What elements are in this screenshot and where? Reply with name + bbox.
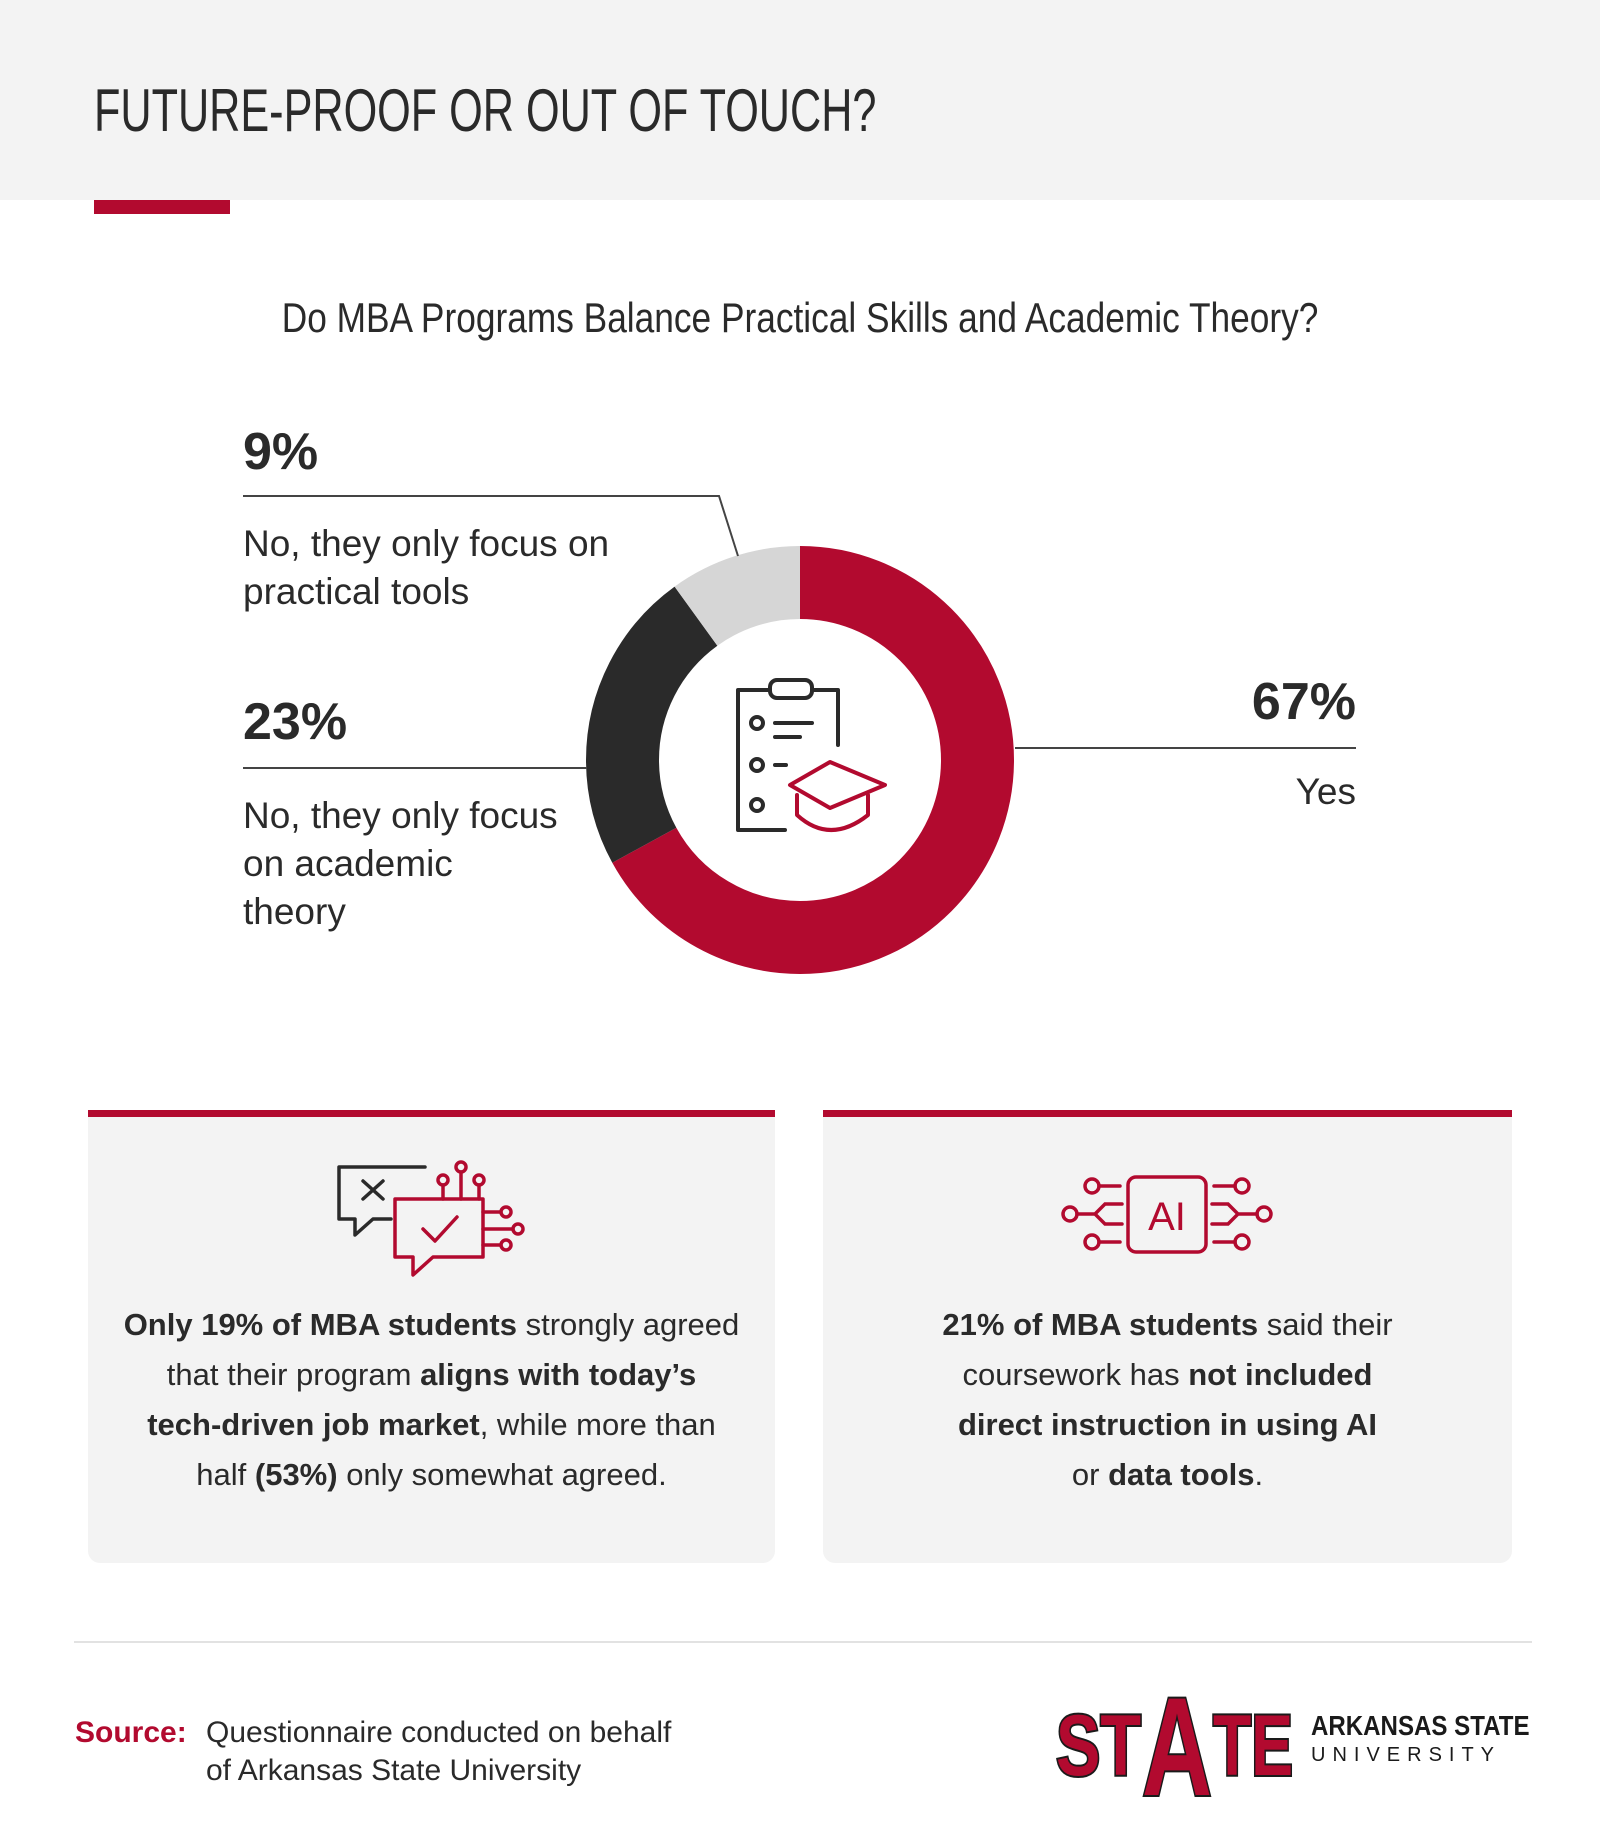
title: FUTURE-PROOF OR OUT OF TOUCH? <box>94 77 876 144</box>
text: left card <box>124 1307 739 1492</box>
source: of Arkansas State University <box>206 1754 581 1787</box>
icon: clipboard with graduation cap <box>738 680 885 830</box>
divider <box>74 1641 1532 1643</box>
label: 67% <box>1252 673 1356 812</box>
label: 67%: Yes <box>1296 771 1356 812</box>
label: 23% <box>243 693 558 932</box>
text: right card: 21% of MBA students said their <box>942 1307 1393 1342</box>
text: right card: coursework has not included <box>962 1357 1372 1392</box>
label: 23%: on academic <box>243 843 453 884</box>
icon: chat bubbles <box>337 1160 525 1277</box>
text: left card: tech-driven job market, while more than <box>147 1407 716 1442</box>
red accent bar <box>94 200 230 214</box>
text: left card: that their program aligns with today’s <box>167 1357 696 1392</box>
logo: STATE <box>1056 1675 1293 1805</box>
label: 23%: No, they only focus <box>243 795 558 836</box>
leader lines <box>243 496 738 556</box>
logo: wordmark: ARKANSAS STATE <box>1311 1710 1530 1741</box>
card: right <box>823 1110 1512 1563</box>
label: 9%: No, they only focus on <box>243 523 609 564</box>
text: right card: direct instruction in using AI <box>958 1407 1377 1442</box>
source <box>75 1716 672 1787</box>
source: Source: <box>75 1716 187 1749</box>
label: 9%: 9% <box>243 423 318 481</box>
card: left <box>88 1110 775 1563</box>
logo: wordmark <box>1311 1710 1530 1766</box>
text: left card: half (53%) only somewhat agreed. <box>196 1457 667 1492</box>
icon: AI chip <box>1061 1175 1273 1254</box>
logo: wordmark: UNIVERSITY <box>1311 1744 1501 1766</box>
icon: AI chip: AI <box>1148 1195 1186 1239</box>
logo: STATE: ST <box>1056 1698 1141 1794</box>
source: Questionnaire conducted on behalf <box>206 1716 671 1749</box>
text: left card: Only 19% of MBA students strongly agreed <box>124 1307 739 1342</box>
subtitle: Do MBA Programs Balance Practical Skills and Academic Theory? <box>282 294 1318 341</box>
text: right card <box>942 1307 1393 1492</box>
label: 9% <box>243 423 609 612</box>
header band <box>0 0 1600 200</box>
label: 9%: practical tools <box>243 571 469 612</box>
label: 23%: 23% <box>243 693 347 751</box>
label: 23%: theory <box>243 891 346 932</box>
donut chart <box>243 495 1356 974</box>
text: right card: or data tools. <box>1072 1457 1263 1492</box>
label: 67%: 67% <box>1252 673 1356 731</box>
